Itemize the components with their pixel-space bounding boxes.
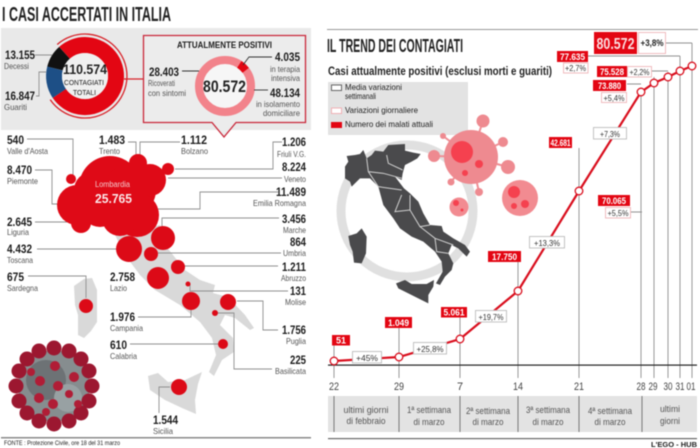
date axis labels: 21 — [574, 381, 584, 393]
value labels: 51 — [336, 336, 346, 346]
map labels: east column: Abruzzo — [281, 273, 306, 283]
map labels: east column: Veneto — [284, 174, 306, 184]
label: isolamento domiciliare: in isolamento — [256, 99, 300, 109]
map labels: east column: Umbria — [283, 248, 306, 258]
label: isolamento domiciliare: 48.134 — [270, 86, 300, 100]
map labels: east column: 1.756 — [282, 323, 306, 337]
legend: settimanali — [345, 91, 376, 101]
week bands: 1ª settimana — [407, 405, 452, 416]
map labels: north-west column: 4.432 — [7, 242, 32, 256]
map labels: centre column: Calabria — [110, 351, 137, 361]
map labels: centre column: 1.544 — [153, 413, 178, 427]
map labels: centre column: Bolzano — [181, 146, 208, 156]
week bands: di marzo — [532, 417, 564, 428]
title: casi accertati: I CASI ACCERTATI IN ITALIA — [2, 4, 171, 26]
label: ricoverati — [148, 65, 199, 98]
map labels: centre column: 2.758 — [110, 270, 135, 284]
bottom rule — [328, 438, 697, 439]
map labels: east column: 3.456 — [282, 212, 306, 226]
percentage labels — [352, 32, 666, 363]
week bands: 3ª settimana — [526, 405, 571, 416]
map labels: east column: Friuli V.G. — [277, 149, 306, 159]
map: dark Italy — [345, 144, 470, 303]
map labels: centre column: Sicilia — [153, 426, 173, 436]
value labels: 1.049 — [388, 318, 409, 328]
value labels: 73.880 — [598, 81, 621, 91]
chart: timeline: +45% — [356, 353, 378, 363]
chart line — [334, 66, 692, 361]
leader lines — [27, 139, 288, 413]
map labels: east column: 1.206 — [282, 135, 306, 149]
label: guariti: Guariti — [4, 102, 27, 112]
decorative ring around map — [341, 145, 473, 277]
map labels: north-west column: Piemonte — [7, 176, 38, 186]
donut: contagiati totali: CONTAGIATI — [64, 78, 104, 87]
map labels: east column: 11.489 — [276, 185, 306, 199]
connector line — [124, 78, 143, 80]
value labels — [332, 32, 637, 346]
label: isolamento domiciliare: domiciliare — [263, 108, 300, 118]
week bands: ultimi giorni — [344, 405, 388, 416]
label: decessi: Decessi — [4, 61, 29, 71]
date axis labels: 29 — [394, 381, 404, 393]
label: terapia intensiva: 4.035 — [275, 50, 300, 64]
map labels: east column: Puglia — [286, 336, 306, 346]
value labels: 17.750 — [492, 252, 517, 262]
chart: timeline: +2,7% — [565, 63, 586, 73]
week bands: 2ª settimana — [466, 406, 511, 417]
donut: contagiati totali — [50, 34, 127, 118]
legend: Variazioni giornaliere — [345, 105, 418, 115]
week bands: 4ª settimana — [588, 406, 633, 417]
date axis labels: 22 — [329, 381, 339, 393]
map labels: east column: 1.211 — [282, 260, 306, 274]
week bands: giorni — [660, 416, 680, 427]
map: lombardia value: 25.765 — [95, 192, 132, 206]
chart baseline — [328, 364, 697, 366]
map labels: east column: 131 — [290, 284, 306, 298]
date axis labels: 7 — [457, 381, 463, 393]
label: guariti — [4, 72, 46, 112]
map labels: centre column: 1.483 — [99, 133, 125, 147]
icon: medium red virus — [502, 180, 538, 216]
donut: contagiati totali: TOTALI — [73, 88, 96, 97]
chart: timeline: +3,8% — [640, 38, 664, 48]
label: ricoverati: 28.403 — [149, 65, 179, 79]
date axis labels: 31 — [676, 381, 684, 393]
map labels: centre column: 1.976 — [110, 310, 135, 324]
map labels: centre column: Lazio — [110, 283, 127, 293]
title: trend: IL TREND DEI CONTAGIATI — [327, 36, 463, 56]
map labels: north-west column: 675 — [7, 270, 24, 284]
value labels: 80.572 — [596, 36, 635, 53]
map labels: east column: 8.224 — [282, 160, 306, 174]
map labels: north-west column: 540 — [7, 133, 24, 147]
value labels: 42.681 — [550, 138, 570, 148]
donut: 80.572 — [199, 60, 251, 112]
map labels: north-west column: Valle d'Aosta — [7, 146, 48, 156]
icon: small red virus — [450, 198, 468, 216]
chart: timeline: +25,8% — [416, 344, 444, 354]
map labels: centre column: 1.112 — [181, 133, 207, 147]
chart points — [330, 62, 696, 365]
map: lombardia value — [95, 180, 132, 206]
map labels: east column: Molise — [285, 297, 306, 307]
week bands: di marzo — [594, 417, 626, 428]
map labels: east column — [253, 135, 306, 376]
map labels: east column: Marche — [283, 225, 306, 235]
map: red bubbles north — [57, 154, 174, 237]
map: Italy regions grey — [74, 225, 254, 414]
label: isolamento domiciliare — [254, 86, 300, 118]
map labels: north-west column: Liguria — [7, 227, 29, 237]
chart: timeline — [328, 32, 697, 393]
map labels: centre column — [99, 133, 208, 436]
date axis labels — [329, 381, 696, 393]
panel: totals summary — [1, 28, 311, 137]
chart guide lines — [334, 43, 692, 378]
value labels: 75.528 — [600, 67, 624, 77]
map labels: north-west column: Sardegna — [7, 283, 38, 293]
date axis labels: 28 — [636, 381, 646, 393]
map labels: centre column: 610 — [110, 338, 127, 352]
donut: contagiati totali: 110.574 — [63, 61, 107, 77]
legend — [328, 82, 468, 135]
panel: attualmente positivi: ATTUALMENTE POSITIVI — [177, 40, 272, 50]
chart: timeline: +19,7% — [478, 312, 504, 322]
label: ricoverati: Ricoverati — [148, 78, 175, 88]
date axis labels: 01 — [686, 381, 696, 393]
label: guariti: 16.847 — [5, 89, 35, 103]
week bands — [328, 396, 697, 432]
map labels: east column: 225 — [290, 353, 306, 367]
label: decessi: 13.155 — [5, 48, 35, 62]
icon: large red virus — [428, 114, 515, 196]
week bands: di marzo — [414, 417, 444, 428]
chart: timeline: +2,2% — [630, 67, 650, 77]
map labels: north-west column: 2.645 — [7, 215, 32, 229]
legend: Numero dei malati attuali — [345, 119, 433, 129]
date axis labels: 30 — [664, 381, 672, 393]
label: ricoverati: con sintomi — [148, 88, 186, 98]
map: red bubbles centre and south — [79, 226, 236, 395]
donut: 80.572: 80.572 — [203, 77, 246, 96]
week bands: ultimi — [660, 404, 680, 415]
date axis labels: 29 — [648, 381, 658, 393]
map labels: centre column: Campania — [110, 323, 143, 333]
label: terapia intensiva — [243, 50, 300, 83]
label: terapia intensiva: in terapia — [270, 64, 300, 74]
value labels: 70.065 — [602, 196, 626, 206]
map labels: centre column: Trento — [99, 146, 120, 156]
icon: coronavirus — [8, 340, 100, 432]
date axis labels: 14 — [513, 381, 523, 393]
label: decessi — [4, 48, 52, 71]
map labels: east column: 864 — [290, 235, 306, 249]
map labels: north-west column: Toscana — [7, 255, 33, 265]
value labels: 77.635 — [560, 52, 585, 62]
chart: timeline: +5,5% — [608, 208, 629, 218]
map labels: east column: Emilia Romagna — [253, 198, 306, 208]
map labels: east column: Basilicata — [275, 366, 306, 376]
chart: timeline: +5,4% — [604, 93, 625, 103]
source line: FONTE : Protezione Civile, ore 18 del 31 marzo — [4, 440, 120, 447]
chart: timeline: +13,3% — [534, 238, 560, 248]
map labels: north-west column: 8.470 — [7, 163, 32, 177]
label: terapia intensiva: intensiva — [271, 73, 300, 83]
map: lombardia value: Lombardia — [95, 180, 130, 189]
panel: attualmente positivi — [144, 36, 306, 137]
value labels: 5.061 — [444, 308, 464, 318]
week bands: di febbraio — [346, 416, 386, 427]
chart: timeline: +7,3% — [600, 129, 620, 139]
map labels: north-west column — [7, 133, 48, 293]
legend: Media variazioni — [345, 82, 402, 92]
subtitle: Casi attualmente positivi (esclusi morti e guariti) — [328, 64, 552, 78]
week bands: di marzo — [472, 417, 504, 428]
top rule right — [327, 29, 698, 30]
